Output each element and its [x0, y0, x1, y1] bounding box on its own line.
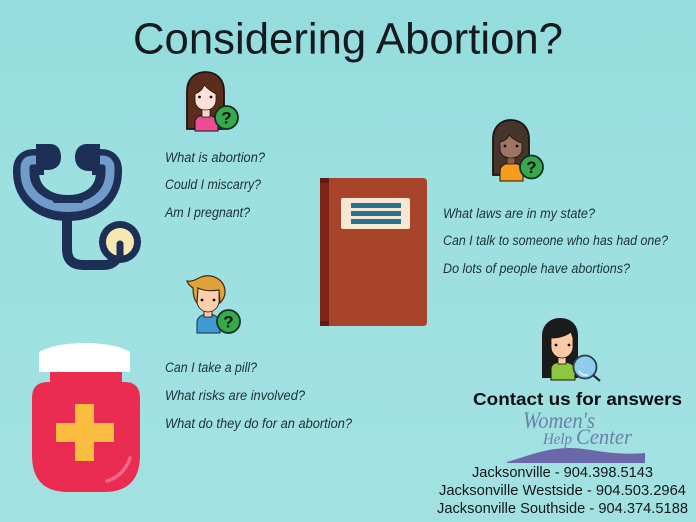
text block: phone numbers: Jacksonville Southside - 904.374.5188: [437, 500, 688, 517]
text block: first questions: What is abortion?: [165, 150, 265, 165]
logo: Women's Help Center: Center: [576, 424, 632, 449]
title: Considering Abortion?: [133, 16, 563, 64]
text block: state law questions: Can I talk to someone who has had one?: [443, 233, 668, 248]
question badge: ?: [526, 158, 537, 177]
magnifier: [574, 356, 600, 381]
text block: phone numbers: Jacksonville - 904.398.5143: [472, 464, 653, 481]
text block: first questions: Am I pregnant?: [164, 205, 250, 220]
icon: book: [320, 178, 427, 326]
icon: medicine bottle: [32, 343, 140, 492]
logo: Women's Help Center: Help: [542, 431, 572, 448]
person: dark-haired woman with question badge: [493, 120, 543, 181]
text block: procedure questions: What risks are involved?: [165, 388, 305, 403]
text block: procedure questions: [165, 360, 352, 431]
question badge: ?: [221, 108, 232, 128]
text block: state law questions: What laws are in my state?: [443, 206, 595, 221]
text block: first questions: Could I miscarry?: [165, 177, 261, 192]
text block: state law questions: Do lots of people have abortions?: [443, 261, 630, 276]
question badge: ?: [223, 312, 234, 332]
contact heading: Contact us for answers: [473, 389, 682, 409]
person: woman with magnifier: [542, 318, 600, 381]
text block: procedure questions: What do they do for an abortion?: [165, 416, 352, 431]
text block: phone numbers: [437, 464, 688, 517]
text block: first questions: [164, 150, 265, 220]
logo: Women's Help Center: [507, 408, 645, 463]
text block: state law questions: [443, 206, 668, 276]
person: boy with question badge: [187, 276, 240, 333]
logo: Women's Help Center: Women's: [523, 408, 595, 433]
text block: phone numbers: Jacksonville Westside - 904.503.2964: [439, 482, 686, 499]
person: woman with question badge: [187, 72, 238, 131]
text block: procedure questions: Can I take a pill?: [165, 360, 257, 375]
icon: stethoscope: [25, 144, 141, 265]
